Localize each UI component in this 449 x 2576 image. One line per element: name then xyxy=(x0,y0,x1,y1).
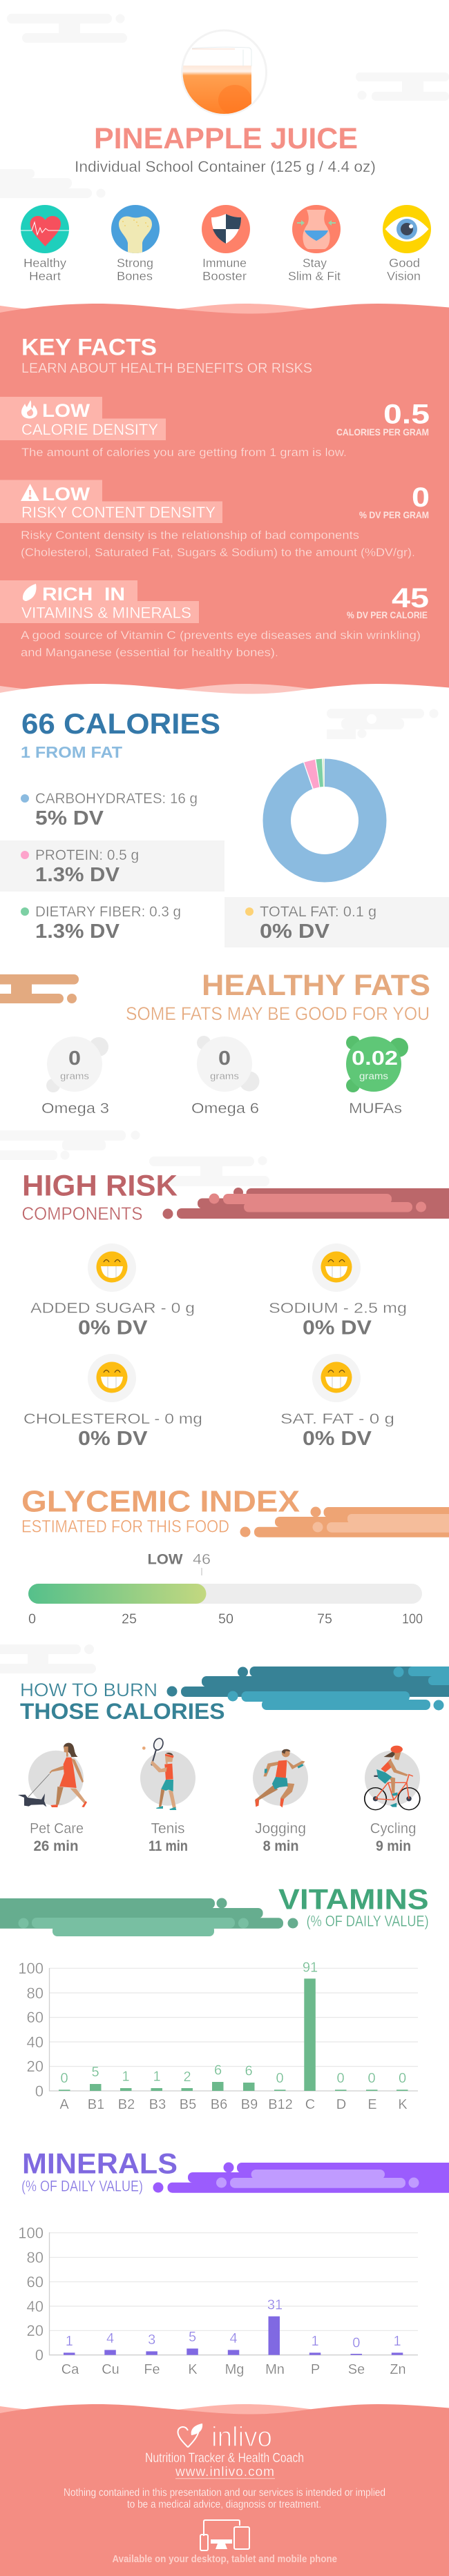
nutrient: dietary fiber xyxy=(21,904,181,943)
bar chart: minerals: Cu xyxy=(102,2362,120,2377)
gauge value label xyxy=(148,1552,211,1575)
label: immune booster xyxy=(202,256,247,283)
activity: pet care: Pet Care xyxy=(30,1821,84,1837)
heading: 66 calories: 66 CALORIES xyxy=(21,707,220,740)
label: healthy heart xyxy=(23,256,66,283)
gauge bar xyxy=(28,1584,422,1604)
description: A good source of Vitamin C (prevents eye diseases and skin wrinkling) xyxy=(21,629,421,642)
fat: omega 3: 0 xyxy=(68,1048,81,1070)
label: stay slim and fit xyxy=(288,256,341,283)
bar chart: vitamins: E xyxy=(367,2097,377,2112)
activity: pet care xyxy=(18,1743,87,1854)
fact: risky content density xyxy=(0,480,430,559)
label: immune booster: Immune xyxy=(202,256,247,270)
nutrient: dietary fiber: 1.3% DV xyxy=(35,921,120,943)
bar chart: vitamins: 6 xyxy=(245,2063,253,2078)
subheading: ESTIMATED FOR THIS FOOD xyxy=(21,1517,229,1537)
bar chart: vitamins: 0 xyxy=(35,2083,44,2100)
icon: healthy heart xyxy=(21,205,69,253)
bar chart: minerals: Zn xyxy=(390,2362,406,2377)
bar chart: vitamins: B2 xyxy=(118,2097,135,2112)
donut chart xyxy=(277,758,372,868)
nutrient: carbohydrates xyxy=(21,791,198,829)
subheading: (% OF DAILY VALUE) xyxy=(21,2178,143,2195)
label: strong bones xyxy=(117,256,153,283)
description: (Cholesterol, Saturated Fat, Sugars & Sodium) to the amount (%DV/gr). xyxy=(21,547,415,559)
website link: www.inlivo.com xyxy=(175,2465,274,2479)
bar chart: vitamins: B9 xyxy=(241,2097,258,2112)
nutrient: carbohydrates: CARBOHYDRATES: 16 g xyxy=(35,791,198,807)
bar chart: vitamins: 60 xyxy=(27,2009,44,2026)
bar chart: minerals: K xyxy=(188,2362,198,2377)
activity: jogging: 8 min xyxy=(263,1838,299,1854)
fat: omega 3: grams xyxy=(60,1070,89,1081)
bar chart: minerals: 80 xyxy=(27,2249,44,2266)
icon: strong bones xyxy=(111,205,160,255)
nutrient: total fat xyxy=(224,897,449,947)
bar chart: minerals: 100 xyxy=(18,2225,44,2241)
bar chart: vitamins: 100 xyxy=(18,1960,44,1977)
bar chart: vitamins: D xyxy=(336,2097,346,2112)
fact: calorie density xyxy=(0,397,430,459)
logo: inlivo xyxy=(178,2421,272,2452)
unit: calories per gram: CALORIES PER GRAM xyxy=(336,426,429,437)
heading: glycemic index: GLYCEMIC INDEX xyxy=(21,1485,300,1518)
gauge scale: 25 xyxy=(122,1612,137,1627)
component: sodium: 0% DV xyxy=(303,1317,372,1339)
fat: mufas: 0.02 xyxy=(352,1048,398,1070)
component: cholesterol: CHOLESTEROL - 0 mg xyxy=(23,1411,202,1427)
nutrient: carbohydrates: 5% DV xyxy=(35,807,104,829)
component: added sugar xyxy=(30,1243,195,1339)
activity: jogging xyxy=(253,1749,308,1854)
value: 45: 45 xyxy=(392,583,429,613)
panel: glycemic index xyxy=(21,1485,449,1627)
gauge scale: 50 xyxy=(218,1612,233,1627)
bar chart: minerals: 4 xyxy=(106,2331,114,2346)
fat: mufas: MUFAs xyxy=(349,1101,402,1117)
description xyxy=(21,529,415,559)
gauge scale: 0 xyxy=(28,1612,36,1627)
decorative bar xyxy=(163,1188,449,1219)
value: 0.5: 0.5 xyxy=(383,399,430,429)
icon: leaf xyxy=(23,584,36,601)
panel: key facts xyxy=(0,304,449,711)
label: strong bones: Strong xyxy=(117,256,153,270)
rating: low: LOW xyxy=(42,484,90,504)
background cloud top left xyxy=(7,14,127,43)
panel: calories xyxy=(0,707,449,947)
decorative bar xyxy=(167,1666,449,1710)
bar chart: minerals: 4 xyxy=(229,2331,238,2346)
bar chart: minerals: 60 xyxy=(27,2273,44,2291)
panel: vitamins xyxy=(0,1883,429,2112)
gauge value label: LOW xyxy=(148,1552,183,1568)
activity: tenis xyxy=(140,1737,195,1854)
bar chart: vitamins: 0 xyxy=(60,2071,68,2086)
subtitle: Individual School Container (125 g / 4.4 oz) xyxy=(75,158,376,175)
bar chart: vitamins: B1 xyxy=(88,2097,104,2112)
decorative bar xyxy=(0,1898,298,1936)
bar chart: vitamins xyxy=(18,1960,418,2112)
gauge scale: 100 xyxy=(402,1612,423,1627)
background cloud left xyxy=(0,1130,140,1160)
disclaimer: to be a medical advice, diagnosis or treatment. xyxy=(127,2499,321,2510)
bar chart: minerals: Mg xyxy=(225,2362,244,2377)
nutrient: protein xyxy=(0,840,224,892)
bar chart: vitamins: B6 xyxy=(211,2097,227,2112)
bar chart: vitamins: 1 xyxy=(153,2069,161,2085)
activity: tenis: 11 min xyxy=(149,1838,188,1854)
bar chart: minerals: Fe xyxy=(144,2362,160,2377)
nutrient: total fat: 0% DV xyxy=(260,921,330,943)
fat: omega 3: Omega 3 xyxy=(41,1101,109,1117)
bar chart: vitamins: 1 xyxy=(122,2069,130,2085)
fat: omega 6 xyxy=(191,1036,260,1117)
description: and Manganese (essential for healthy bones). xyxy=(21,647,278,659)
bar chart: minerals: 1 xyxy=(393,2334,401,2349)
panel: minerals xyxy=(18,2147,449,2377)
gauge scale: 75 xyxy=(317,1612,332,1627)
component: sodium: SODIUM - 2.5 mg xyxy=(269,1300,407,1317)
bar chart: minerals: 20 xyxy=(27,2322,44,2339)
heading: high risk: HIGH RISK xyxy=(22,1169,178,1202)
nutrient: protein: PROTEIN: 0.5 g xyxy=(35,847,139,863)
component: saturated fat xyxy=(280,1354,394,1450)
bar chart: minerals: 1 xyxy=(311,2334,319,2349)
label: good vision: Good xyxy=(389,256,420,270)
activity: pet care: 26 min xyxy=(33,1838,79,1854)
component: sodium xyxy=(269,1243,407,1339)
component: cholesterol xyxy=(23,1354,202,1450)
panel: high risk components xyxy=(0,1130,449,1450)
bar chart: vitamins: A xyxy=(59,2097,69,2112)
bar chart: vitamins: 0 xyxy=(367,2071,376,2086)
background cloud xyxy=(0,1644,96,1673)
panel: footer xyxy=(0,2404,449,2576)
rating: rich in: RICH IN xyxy=(42,584,125,604)
gauge scale xyxy=(28,1612,423,1627)
bar chart: minerals: 0 xyxy=(35,2346,44,2364)
icon: stay slim and fit xyxy=(292,205,341,253)
background cloud left xyxy=(0,169,105,198)
icon: good vision xyxy=(383,205,431,253)
component: added sugar: ADDED SUGAR - 0 g xyxy=(30,1300,195,1317)
bar chart: vitamins: C xyxy=(305,2097,315,2112)
background cloud xyxy=(327,709,438,739)
disclaimer: Nothing contained in this presentation and our services is intended or implied xyxy=(64,2487,385,2499)
activity: cycling: Cycling xyxy=(370,1821,416,1837)
nutrient: protein: 1.3% DV xyxy=(35,864,120,886)
fat: mufas xyxy=(346,1036,408,1117)
nutrient: total fat: TOTAL FAT: 0.1 g xyxy=(260,904,376,920)
disclaimer xyxy=(64,2487,385,2510)
icon: flame xyxy=(21,400,37,418)
availability note: Available on your desktop, tablet and mobile phone xyxy=(112,2553,337,2565)
component: added sugar: 0% DV xyxy=(78,1317,148,1339)
bar chart: vitamins: K xyxy=(398,2097,408,2112)
fat: omega 3 xyxy=(41,1036,109,1117)
bar chart: minerals: 5 xyxy=(189,2330,196,2345)
bar chart: minerals: 40 xyxy=(27,2298,44,2315)
fat: omega 6: 0 xyxy=(218,1048,231,1070)
bar chart: minerals: P xyxy=(311,2362,320,2377)
label: risky content density: RISKY CONTENT DENSITY xyxy=(21,504,216,521)
bar chart: minerals: Mn xyxy=(265,2362,285,2377)
heading: vitamins: VITAMINS xyxy=(278,1883,429,1916)
value: 0: 0 xyxy=(412,482,430,513)
label: healthy heart: Healthy xyxy=(23,256,66,270)
bar chart: vitamins: 2 xyxy=(183,2069,191,2085)
fact: rich in vitamins and minerals xyxy=(0,580,429,659)
heading: those calories: THOSE CALORIES xyxy=(20,1699,225,1724)
bar chart: vitamins: B5 xyxy=(180,2097,196,2112)
component: saturated fat: 0% DV xyxy=(303,1428,372,1450)
bar chart: minerals: 1 xyxy=(66,2334,73,2349)
logo: inlivo: inlivo xyxy=(211,2421,272,2452)
subheading: from fat: 1 FROM FAT xyxy=(21,743,122,761)
component: saturated fat: SAT. FAT - 0 g xyxy=(280,1411,394,1427)
bar chart: vitamins: 91 xyxy=(303,1960,318,1975)
label: healthy heart: Heart xyxy=(29,269,61,283)
heading: key facts: KEY FACTS xyxy=(21,334,157,360)
unit: percent dv per calorie: % DV PER CALORIE xyxy=(347,609,428,620)
bar chart: vitamins: 0 xyxy=(336,2071,345,2086)
gauge value label: 46 xyxy=(193,1552,211,1568)
fat: omega 6: Omega 6 xyxy=(191,1101,259,1117)
bar chart: vitamins: B3 xyxy=(149,2097,166,2112)
fat: mufas: grams xyxy=(359,1070,388,1081)
icon: devices xyxy=(200,2520,249,2550)
activity: cycling xyxy=(365,1746,420,1854)
decorative bar xyxy=(240,1507,449,1537)
bar chart: vitamins: 80 xyxy=(27,1985,44,2002)
bar chart: vitamins: 6 xyxy=(214,2063,222,2078)
fat: omega 6: grams xyxy=(210,1070,239,1081)
heading: healthy fats: HEALTHY FATS xyxy=(202,969,430,1002)
bar chart: minerals: Ca xyxy=(61,2362,79,2377)
header section xyxy=(21,29,431,280)
decorative bar xyxy=(0,974,79,1003)
panel: how to burn those calories xyxy=(0,1644,449,1854)
bar chart: vitamins: 0 xyxy=(276,2071,284,2086)
label: good vision: Vision xyxy=(387,269,421,283)
bar chart: vitamins: 40 xyxy=(27,2034,44,2051)
component: cholesterol: 0% DV xyxy=(78,1428,148,1450)
activity: jogging: Jogging xyxy=(255,1821,306,1837)
label: strong bones: Bones xyxy=(117,269,153,283)
description xyxy=(21,629,421,659)
label: good vision xyxy=(387,256,421,283)
bar chart: minerals: 31 xyxy=(267,2298,283,2313)
icon: warning triangle xyxy=(21,484,39,501)
label: stay slim and fit: Slim & Fit xyxy=(288,269,341,283)
bar chart: vitamins: 20 xyxy=(27,2058,44,2075)
rating: low: LOW xyxy=(42,400,90,421)
description: The amount of calories you are getting from 1 gram is low. xyxy=(21,446,347,459)
heading: minerals: MINERALS xyxy=(22,2147,178,2179)
label: immune booster: Booster xyxy=(202,269,247,283)
activity: tenis: Tenis xyxy=(151,1821,185,1837)
bar chart: minerals: 3 xyxy=(148,2332,155,2348)
description: Risky Content density is the relationship of bad components xyxy=(21,529,359,542)
subheading: key facts: LEARN ABOUT HEALTH BENEFITS OR RISKS xyxy=(21,361,312,376)
decorative bar xyxy=(153,2163,449,2193)
label: calorie density: CALORIE DENSITY xyxy=(21,421,158,438)
background cloud right xyxy=(356,72,449,101)
nutrient: dietary fiber: DIETARY FIBER: 0.3 g xyxy=(35,904,181,920)
juice glass image xyxy=(180,30,267,115)
bar chart: vitamins: 0 xyxy=(399,2071,406,2086)
bar chart: vitamins: 5 xyxy=(91,2065,99,2080)
title: PINEAPPLE JUICE xyxy=(94,122,358,155)
heading: how to burn: HOW TO BURN xyxy=(20,1680,157,1700)
tagline: Nutrition Tracker & Health Coach xyxy=(145,2451,304,2466)
subheading: components: COMPONENTS xyxy=(22,1203,142,1224)
label: vitamins and minerals: VITAMINS & MINERALS xyxy=(21,604,191,621)
activity: cycling: 9 min xyxy=(376,1838,411,1854)
panel: healthy fats xyxy=(0,969,430,1117)
bar chart: vitamins: B12 xyxy=(268,2097,293,2112)
bar chart: minerals xyxy=(18,2225,418,2377)
subheading: SOME FATS MAY BE GOOD FOR YOU xyxy=(126,1003,430,1024)
icon: immune booster xyxy=(202,205,250,253)
label: stay slim and fit: Stay xyxy=(303,256,327,270)
unit: percent dv per gram: % DV PER GRAM xyxy=(359,509,429,520)
background cloud center xyxy=(149,1157,269,1186)
bar chart: minerals: 0 xyxy=(352,2336,360,2351)
bar chart: minerals: Se xyxy=(348,2362,365,2377)
